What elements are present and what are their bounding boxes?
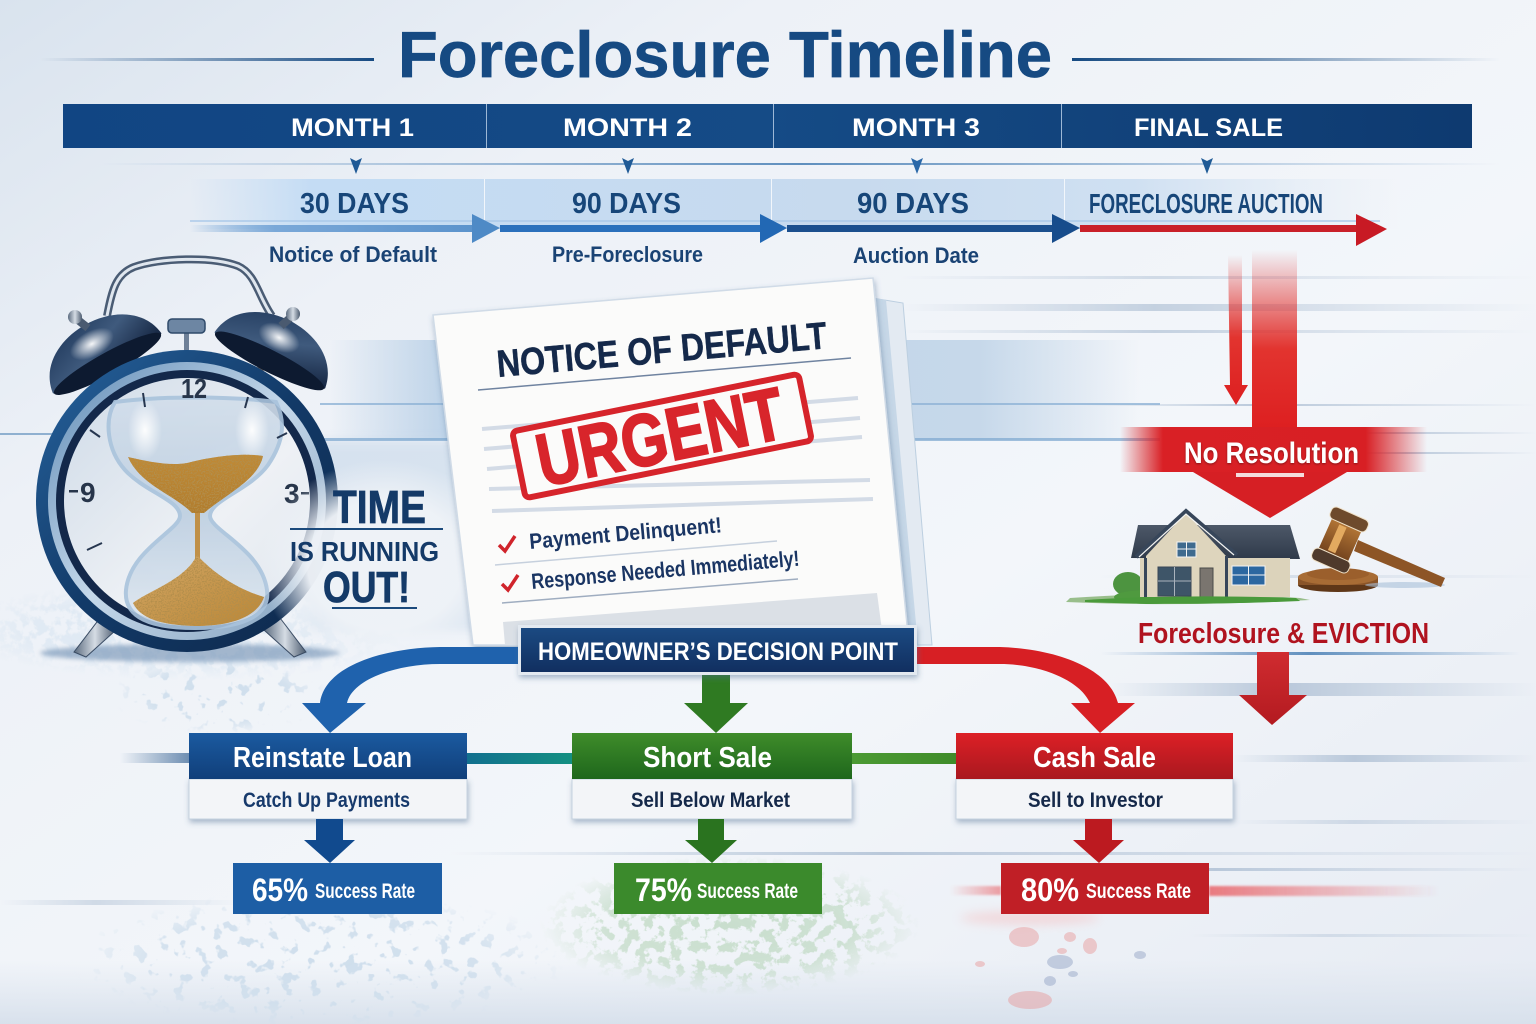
- no resolution banner arrow: [1120, 427, 1427, 518]
- decision arrow: green: [684, 672, 748, 733]
- timeline arrows: [190, 214, 1387, 246]
- timeline stage labels: Pre-Foreclosure: [552, 242, 703, 267]
- red arrows from final sale: [1224, 250, 1297, 430]
- option: reinstate loan: Reinstate Loan: [233, 742, 412, 774]
- success rate: 65%: Success Rate: [315, 880, 415, 903]
- option: cash sale: Sell to Investor: [1028, 789, 1163, 812]
- timeline stage labels: Auction Date: [853, 243, 979, 268]
- success rate: 75%: 75%: [635, 872, 692, 908]
- arrow: short sale to rate: [685, 819, 737, 863]
- duration band: 30 DAYS: [300, 188, 409, 220]
- icon: alarm clock with hourglass: [31, 259, 510, 670]
- option: reinstate loan: [189, 733, 467, 819]
- time is running out text: [290, 481, 443, 612]
- icon: alarm clock with hourglass: 3: [284, 478, 300, 509]
- option: reinstate loan: Catch Up Payments: [243, 789, 410, 812]
- notice of default document: NOTICE OF DEFAULT: [495, 315, 829, 386]
- month header bar: [63, 104, 1472, 148]
- icon: house: [1066, 511, 1310, 604]
- no resolution banner arrow: No Resolution: [1184, 437, 1359, 470]
- time is running out text: TIME: [333, 481, 426, 533]
- option connectors: [120, 753, 956, 764]
- success rate: 75%: Success Rate: [697, 880, 798, 903]
- success rate: 80%: [950, 863, 1439, 914]
- red down arrow after eviction: [1239, 652, 1307, 725]
- urgent stamp: URGENT: [529, 371, 791, 502]
- homeowner's decision point box: HOMEOWNER’S DECISION POINT: [538, 638, 898, 666]
- title: Foreclosure Timeline: [398, 18, 1052, 91]
- time is running out text: IS RUNNING: [290, 536, 439, 567]
- success rate: 75%: [614, 863, 822, 914]
- duration band: 90 DAYS: [857, 188, 969, 220]
- timeline tick line and markers: [100, 158, 1500, 174]
- homeowner's decision point box: [518, 625, 917, 675]
- notice of default document: Payment Delinquent!: [528, 512, 723, 554]
- success rate: 80%: 80%: [1021, 872, 1079, 908]
- duration band: [190, 179, 1400, 229]
- option: short sale: [572, 733, 852, 819]
- duration band: FORECLOSURE AUCTION: [1089, 188, 1323, 219]
- icon: gavel: [1298, 505, 1445, 592]
- notice of default document: Response Needed Immediately!: [530, 546, 800, 594]
- foreclosure and eviction label: Foreclosure & EVICTION: [1138, 618, 1429, 650]
- option: cash sale: Cash Sale: [1033, 742, 1156, 774]
- notice of default document: [433, 278, 932, 645]
- arrow: cash sale to rate: [1073, 819, 1124, 863]
- month header bar: MONTH 3: [852, 114, 980, 142]
- icon: alarm clock with hourglass: 9: [80, 477, 96, 508]
- month header bar: MONTH 2: [563, 114, 692, 142]
- icon: alarm clock with hourglass: 12: [181, 373, 207, 404]
- arrow: reinstate to rate: [304, 819, 355, 863]
- duration band: 90 DAYS: [572, 188, 681, 220]
- decision arrow: blue curve: [302, 647, 522, 733]
- month header bar: MONTH 1: [291, 114, 414, 142]
- option: cash sale: [956, 733, 1233, 819]
- hourglass: [109, 398, 282, 628]
- timeline stage labels: Notice of Default: [269, 242, 438, 267]
- time is running out text: OUT!: [323, 563, 410, 612]
- success rate: 65%: 65%: [252, 872, 308, 908]
- timeline stage labels: [269, 242, 979, 268]
- success rate: 65%: [233, 863, 442, 914]
- month header bar: FINAL SALE: [1134, 114, 1283, 142]
- title: [40, 18, 1500, 91]
- option: short sale: Sell Below Market: [631, 789, 790, 812]
- option: short sale: Short Sale: [643, 742, 772, 774]
- success rate: 80%: Success Rate: [1086, 880, 1191, 903]
- decision arrow: red curve: [915, 647, 1135, 733]
